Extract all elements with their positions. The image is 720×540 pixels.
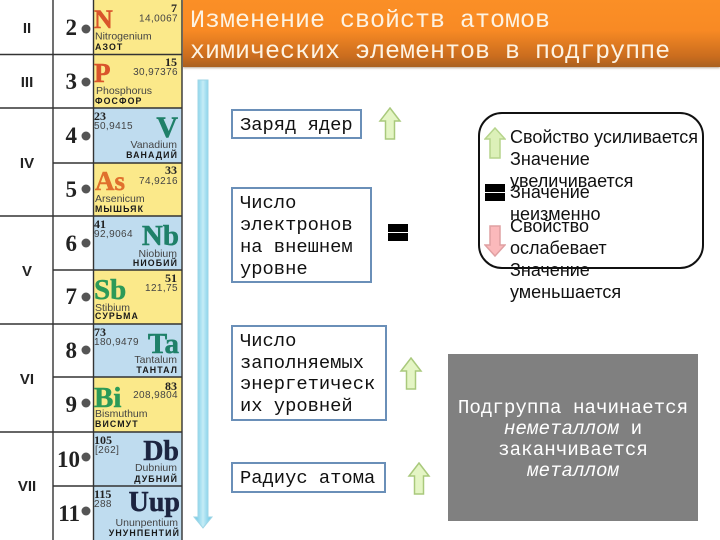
atomic numbers bbox=[94, 1, 177, 501]
callout text bbox=[458, 397, 688, 482]
box: outer electrons: на внешнем bbox=[240, 236, 353, 258]
callout: nonmetal to metal bbox=[448, 354, 698, 521]
atomic masses: 14,0067 bbox=[139, 14, 178, 24]
legend text: increases: Значение bbox=[510, 149, 590, 169]
element symbols: Bi bbox=[94, 382, 121, 414]
box: outer electrons: Число bbox=[240, 192, 296, 214]
legend text: decreases: уменьшается bbox=[510, 282, 621, 302]
latin names: Bismuthum bbox=[95, 408, 148, 420]
legend frame bbox=[478, 112, 704, 269]
russian names: ВАНАДИЙ bbox=[126, 149, 178, 160]
group labels bbox=[18, 20, 36, 495]
period numbers: 11 bbox=[58, 501, 80, 526]
period numbers: 2 bbox=[66, 15, 77, 40]
box: outer electrons bbox=[231, 187, 372, 283]
atomic numbers: 23 bbox=[94, 109, 106, 123]
latin names: Arsenicum bbox=[95, 193, 145, 205]
atomic numbers: 41 bbox=[94, 217, 106, 231]
callout text: Подгруппа начинается bbox=[458, 397, 688, 419]
box: atomic radius: Радиус атома bbox=[240, 467, 375, 489]
atomic numbers: 115 bbox=[94, 487, 111, 501]
russian names: МЫШЬЯК bbox=[95, 204, 144, 214]
russian names: АЗОТ bbox=[95, 42, 123, 52]
russian names: УНУНПЕНТИЙ bbox=[109, 527, 180, 538]
atomic masses: 30,97376 bbox=[133, 67, 178, 78]
callout text: неметаллом и bbox=[504, 418, 642, 440]
atomic numbers: 15 bbox=[165, 55, 177, 69]
atomic masses: 208,9804 bbox=[133, 390, 178, 401]
legend text: increases bbox=[510, 127, 698, 191]
latin names: Nitrogenium bbox=[95, 30, 152, 42]
legend text: unchanged: неизменно bbox=[510, 204, 601, 224]
title text: Изменение свойств атомов bbox=[190, 6, 550, 35]
period numbers: 3 bbox=[66, 69, 77, 94]
russian names bbox=[95, 42, 180, 538]
icon: up arrow radius bbox=[408, 462, 430, 495]
box: atomic radius bbox=[231, 462, 386, 493]
atomic numbers: 33 bbox=[165, 163, 177, 177]
table grid bbox=[0, 0, 182, 540]
atomic numbers: 73 bbox=[94, 325, 106, 339]
group labels: III bbox=[21, 74, 33, 91]
legend text: unchanged: Значение bbox=[510, 182, 590, 202]
icon: equals sign bbox=[388, 224, 408, 241]
period numbers: 8 bbox=[66, 338, 77, 363]
russian names: ТАНТАЛ bbox=[136, 365, 178, 375]
group labels: IV bbox=[20, 155, 34, 172]
icon: up arrow charge bbox=[378, 107, 402, 140]
title banner bbox=[183, 0, 720, 67]
icon: up arrow levels bbox=[400, 357, 422, 390]
box: energy levels: их уровней bbox=[240, 394, 353, 416]
latin names: Niobium bbox=[138, 248, 177, 260]
group labels: VII bbox=[18, 478, 36, 495]
period numbers: 5 bbox=[66, 177, 77, 202]
cell backgrounds bbox=[94, 0, 182, 540]
period numbers bbox=[57, 15, 80, 526]
atomic masses: 74,9216 bbox=[139, 176, 178, 187]
atomic numbers: 7 bbox=[171, 1, 177, 15]
element symbols: P bbox=[94, 58, 110, 88]
russian names: ВИСМУТ bbox=[95, 419, 139, 429]
latin names: Stibium bbox=[95, 302, 130, 314]
electron dots bbox=[82, 24, 90, 516]
box: energy levels: заполняемых bbox=[240, 352, 364, 374]
legend text: decreases: Значение bbox=[510, 260, 590, 280]
latin names: Tantalum bbox=[134, 354, 177, 366]
latin names: Phosphorus bbox=[96, 85, 152, 97]
russian names: ФОСФОР bbox=[95, 96, 143, 106]
box: nuclear charge: Заряд ядер bbox=[240, 114, 353, 136]
title text bbox=[190, 6, 670, 66]
legend text: decreases bbox=[510, 216, 621, 302]
russian names: НИОБИЙ bbox=[133, 257, 178, 268]
box: nuclear charge bbox=[231, 109, 362, 139]
atomic masses: 121,75 bbox=[145, 283, 178, 294]
element symbols: Nb bbox=[142, 220, 179, 252]
box: outer electrons: уровне bbox=[240, 258, 308, 280]
atomic masses: 92,9064 bbox=[94, 229, 133, 240]
element symbols: Db bbox=[143, 436, 179, 467]
legend text: increases: Свойство усиливается bbox=[510, 127, 698, 147]
atomic numbers: 105 bbox=[94, 433, 112, 447]
callout text: металлом bbox=[527, 460, 619, 482]
icon: legend down arrow bbox=[484, 225, 506, 257]
box: energy levels: Число bbox=[240, 330, 296, 352]
element symbols: N bbox=[94, 5, 113, 34]
icon: legend up arrow bbox=[484, 127, 506, 159]
russian names: СУРЬМА bbox=[95, 311, 139, 321]
box: energy levels bbox=[231, 325, 387, 421]
atomic masses: 288 bbox=[94, 499, 112, 510]
box: energy levels: энергетическ bbox=[240, 373, 375, 395]
period numbers: 6 bbox=[66, 231, 77, 256]
latin names: Ununpentium bbox=[116, 517, 178, 529]
atomic masses: 180,9479 bbox=[94, 337, 139, 348]
periodic table panel bbox=[0, 0, 183, 540]
box: outer electrons: электронов bbox=[240, 214, 353, 236]
element symbols bbox=[94, 5, 180, 518]
atomic masses bbox=[94, 14, 178, 510]
russian names: ДУБНИЙ bbox=[134, 473, 178, 484]
legend text: increases: увеличивается bbox=[510, 171, 633, 191]
element symbols: Sb bbox=[94, 274, 126, 306]
period numbers: 4 bbox=[66, 123, 78, 148]
element symbols: As bbox=[95, 166, 125, 196]
icon: legend equals bbox=[485, 184, 505, 201]
legend text: unchanged bbox=[510, 182, 601, 224]
atomic masses: [262] bbox=[95, 445, 119, 456]
element symbols: V bbox=[156, 111, 178, 144]
latin names bbox=[95, 30, 178, 529]
legend text: decreases: Свойство bbox=[510, 216, 589, 236]
group labels: V bbox=[22, 263, 32, 280]
latin names: Dubnium bbox=[135, 462, 177, 474]
element symbols: Uup bbox=[129, 487, 180, 518]
atomic masses: 50,9415 bbox=[94, 121, 133, 132]
period numbers: 7 bbox=[66, 284, 77, 309]
atomic numbers: 83 bbox=[165, 379, 177, 393]
period numbers: 9 bbox=[66, 392, 77, 417]
callout text: заканчивается bbox=[498, 439, 648, 461]
latin names: Vanadium bbox=[130, 139, 177, 151]
element symbols: Ta bbox=[148, 328, 179, 360]
period numbers: 10 bbox=[57, 447, 80, 472]
long down arrow bbox=[193, 80, 213, 529]
legend text: decreases: ослабевает bbox=[510, 238, 607, 258]
group labels: II bbox=[23, 20, 31, 37]
group labels: VI bbox=[20, 371, 34, 388]
atomic numbers: 51 bbox=[165, 271, 177, 285]
title text: химических элементов в подгруппе bbox=[190, 37, 670, 66]
